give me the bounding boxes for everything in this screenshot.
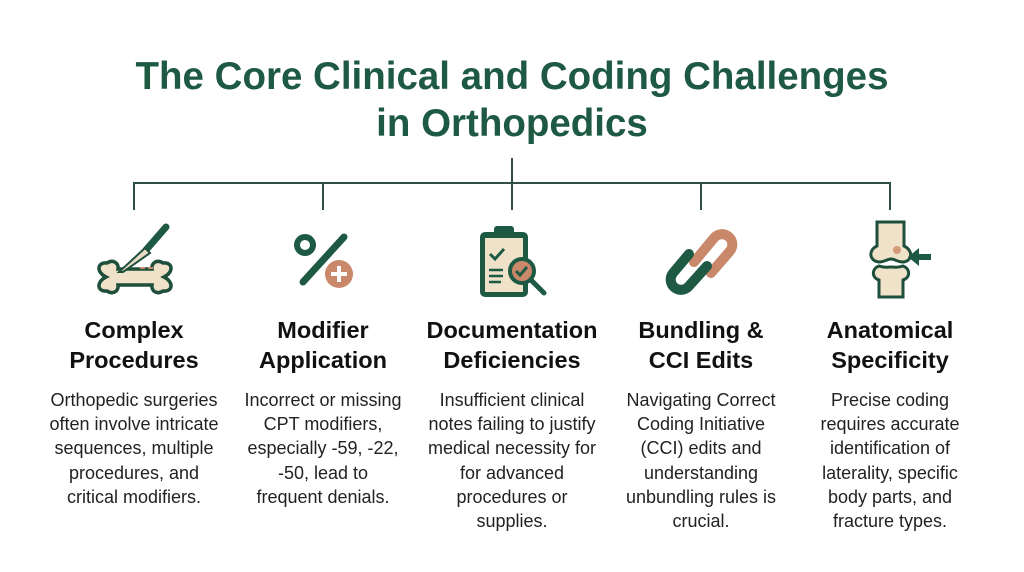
column: documentation deficiencies: supplies. — [476, 511, 548, 531]
column: anatomical specificity: fracture types. — [833, 511, 947, 531]
column: bundling: unbundling rules is — [626, 487, 776, 507]
column: modifier application: especially -59, -22, — [247, 438, 399, 458]
column: bundling — [626, 317, 776, 531]
column: anatomical specificity: Precise coding — [831, 390, 949, 410]
column: anatomical specificity: Specificity — [831, 347, 949, 373]
column: anatomical specificity: Anatomical — [827, 317, 953, 343]
column: complex procedures: sequences, multiple — [54, 438, 214, 458]
column: modifier application: Incorrect or missing — [244, 390, 402, 410]
column: modifier application: Application — [259, 347, 387, 373]
column: modifier application: Modifier — [277, 317, 369, 343]
column: anatomical specificity: body parts, and — [828, 487, 952, 507]
column: documentation deficiencies: for advanced — [460, 463, 564, 483]
column: bundling: (CCI) edits and — [640, 438, 762, 458]
column: anatomical specificity: requires accurate — [820, 414, 960, 434]
column: documentation deficiencies — [426, 317, 598, 531]
column: documentation deficiencies: medical necessity for — [428, 438, 596, 458]
column: documentation deficiencies: notes failing to justify — [428, 414, 596, 434]
column: modifier application: CPT modifiers, — [264, 414, 382, 434]
column: anatomical specificity — [820, 317, 960, 531]
column: complex procedures: procedures, and — [69, 463, 199, 483]
column: modifier application — [244, 317, 402, 507]
column: bundling: crucial. — [672, 511, 730, 531]
title: The Core Clinical and Coding Challenges — [136, 55, 888, 98]
title — [136, 55, 888, 145]
column: bundling: CCI Edits — [649, 347, 753, 373]
column: anatomical specificity: laterality, specific — [822, 463, 958, 483]
title: in Orthopedics — [376, 102, 648, 145]
column: anatomical specificity: identification of — [830, 438, 950, 458]
column: complex procedures: critical modifiers. — [67, 487, 201, 507]
column: documentation deficiencies: procedures or — [456, 487, 568, 507]
column: complex procedures: Procedures — [69, 347, 199, 373]
column: modifier application: frequent denials. — [256, 487, 390, 507]
column: bundling: Bundling & — [638, 317, 764, 343]
column: complex procedures: often involve intricate — [49, 414, 219, 434]
column: complex procedures — [49, 317, 219, 507]
column: bundling: Navigating Correct — [626, 390, 776, 410]
column: modifier application: -50, lead to — [278, 463, 368, 483]
column: bundling: Coding Initiative — [637, 414, 765, 434]
column: documentation deficiencies: Insufficient clinical — [440, 390, 584, 410]
column: documentation deficiencies: Deficiencies — [443, 347, 581, 373]
column: complex procedures: Complex — [84, 317, 184, 343]
column: bundling: understanding — [644, 463, 758, 483]
column: documentation deficiencies: Documentation — [426, 317, 598, 343]
column: complex procedures: Orthopedic surgeries — [50, 390, 218, 410]
